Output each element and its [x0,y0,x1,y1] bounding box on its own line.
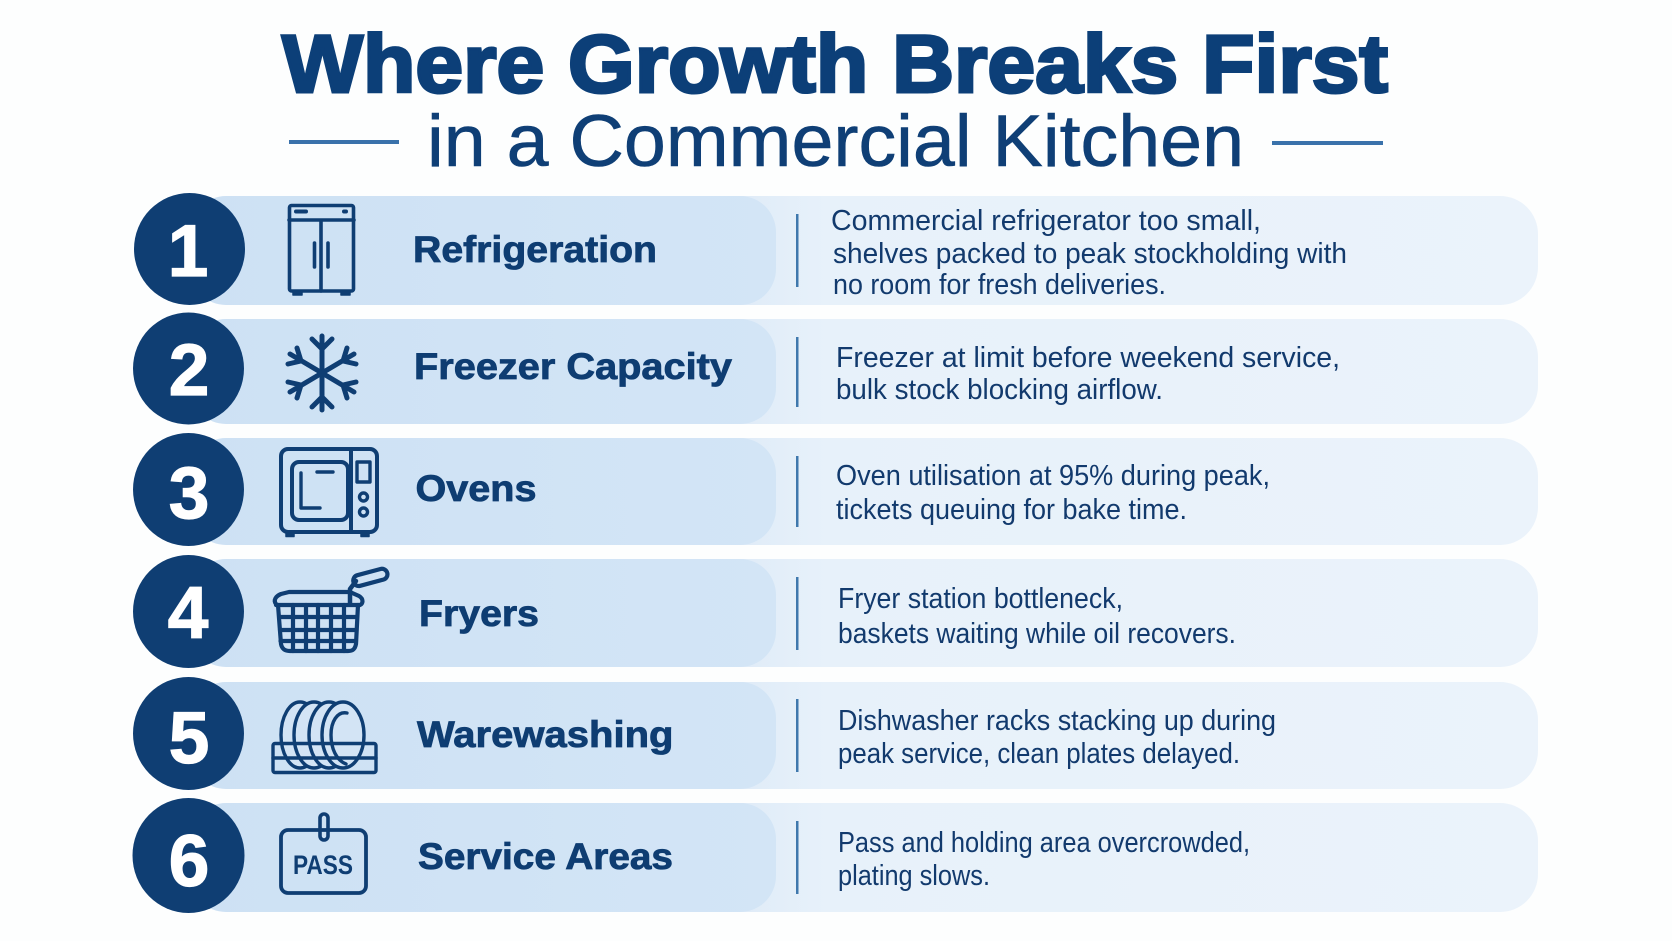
description [836,342,1340,406]
description: shelves packed to peak stockholding with [833,238,1347,270]
icon: refrigerator [289,206,354,295]
description: bulk stock blocking airflow. [836,374,1163,406]
row 4: fryers [133,555,1538,668]
number badge 1 [134,193,245,305]
icon: dish rack [273,702,376,772]
row 1: refrigeration [134,193,1538,305]
label: Service Areas [418,836,673,877]
number badge 2 [133,312,244,424]
icon: snowflake [288,336,356,410]
number badge 5: 5 [169,698,209,779]
title line 2: in a Commercial Kitchen [427,101,1244,182]
icon: oven [281,449,377,536]
description: Oven utilisation at 95% during peak, [836,460,1270,492]
label: Warewashing [417,714,674,755]
number badge 5 [133,677,244,790]
number badge 2: 2 [169,330,209,411]
number badge 4: 4 [168,573,209,654]
icon: pass sign [281,814,366,893]
number badge 4 [133,555,244,668]
description: Dishwasher racks stacking up during [838,705,1276,737]
number badge 1: 1 [168,211,208,292]
label: Fryers [419,593,539,634]
label: Refrigeration [413,229,657,270]
description [838,827,1250,892]
description [838,705,1276,770]
number badge 6: 6 [169,821,209,902]
description: peak service, clean plates delayed. [838,738,1240,770]
description: no room for fresh deliveries. [833,269,1166,301]
icon: pass sign: PASS [293,850,353,880]
number badge 6 [132,798,244,913]
description: Fryer station bottleneck, [838,583,1123,615]
number badge 3: 3 [169,453,209,534]
description: tickets queuing for bake time. [836,494,1187,526]
label: Freezer Capacity [414,346,732,387]
number badge 3 [133,433,244,546]
icon: fryer basket [275,568,389,651]
description [838,583,1236,650]
row 3: ovens [133,433,1538,546]
description: Commercial refrigerator too small, [831,205,1261,237]
row 2: freezer capacity [133,312,1538,424]
description: plating slows. [838,860,990,892]
description [836,460,1270,526]
description [831,205,1347,301]
row 5: warewashing [133,677,1538,790]
description: Freezer at limit before weekend service, [836,342,1340,374]
title line 1: Where Growth Breaks First [282,19,1388,110]
row 6: service areas [132,798,1538,913]
label: Ovens [416,468,536,509]
description: Pass and holding area overcrowded, [838,827,1250,859]
title [282,19,1388,182]
description: baskets waiting while oil recovers. [838,618,1236,650]
